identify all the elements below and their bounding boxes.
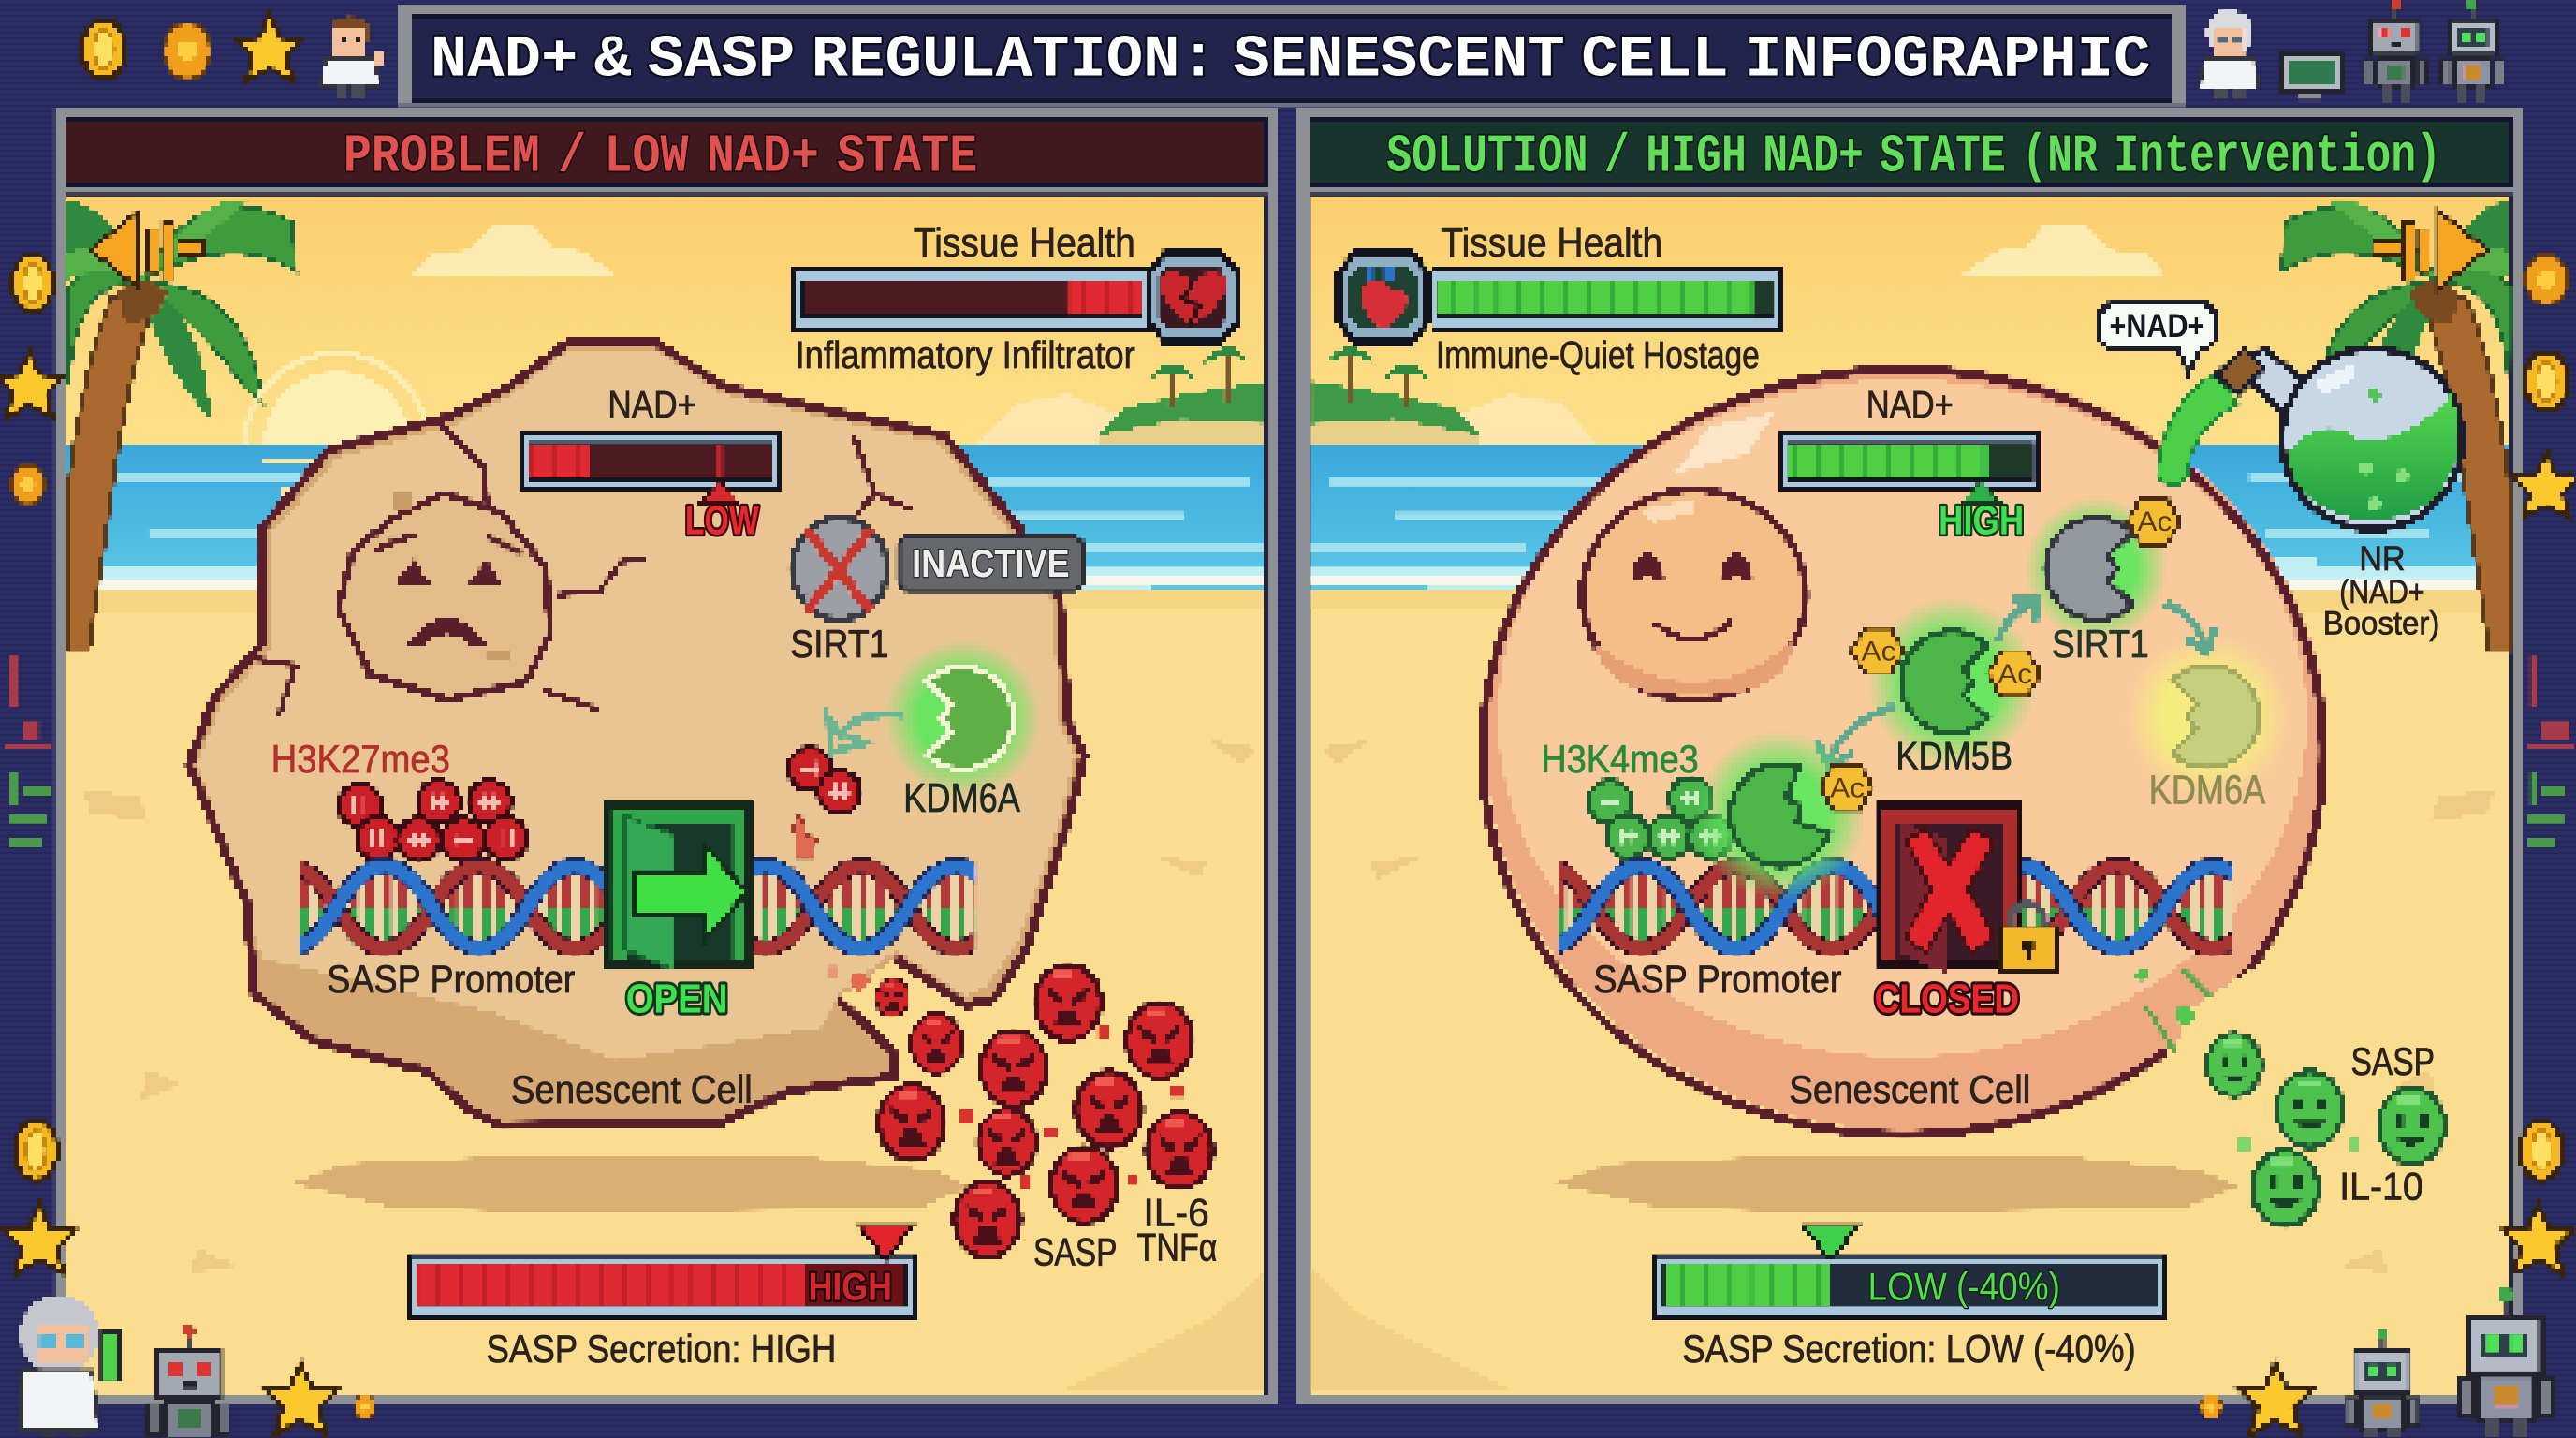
- callout bubble: +NAD+: [2098, 302, 2217, 373]
- sun: [245, 353, 429, 446]
- scene: solution beach background: [1312, 198, 2510, 1394]
- arrow: KDM6A removes marks: [829, 714, 903, 753]
- label: booster: Booster): [2323, 606, 2439, 642]
- arrow: KDM5B to SIRT1: [1998, 598, 2037, 641]
- label: tissue health left: Tissue Health: [914, 220, 1135, 266]
- tissue health bar left: [792, 268, 1150, 332]
- KDM6A inactive enzyme: [2126, 635, 2291, 799]
- panel: problem frame: [54, 107, 1278, 1405]
- label: tissue health right: Tissue Health: [1441, 220, 1662, 266]
- label: H3K27me3: H3K27me3: [271, 737, 450, 781]
- scene: problem beach background: [67, 198, 1265, 1394]
- caption: SASP secretion low: SASP Secretion: LOW (-40%): [1682, 1327, 2136, 1371]
- caption: SASP secretion high: SASP Secretion: HIGH: [487, 1327, 836, 1371]
- tissue health bar right: [1431, 268, 1784, 332]
- Ac labels: Ac: [1862, 637, 1895, 668]
- cell shadow left: [291, 1155, 970, 1212]
- bottom-left characters: [20, 1295, 375, 1438]
- status: CLOSED: CLOSED: [1875, 976, 2019, 1021]
- label: KDM6A left: KDM6A: [903, 775, 1021, 821]
- label: H3K4me3: H3K4me3: [1541, 737, 1699, 781]
- label: NAD+ left: NAD+: [607, 383, 696, 426]
- heading: problem: PROBLEM / LOW NAD+ STATE: [344, 127, 977, 188]
- badge: inactive: [899, 537, 1083, 590]
- arrow: KDM5B to H3K4me3: [1817, 707, 1895, 766]
- panel: solution frame: [1298, 107, 2522, 1405]
- Ac labels: Ac: [2137, 506, 2172, 537]
- cell shadow right: [1553, 1155, 2237, 1212]
- side coins and stars right: [2504, 255, 2576, 1273]
- bar text: HIGH: HIGH: [809, 1265, 892, 1309]
- bar text: LOW -40%: LOW (-40%): [1868, 1265, 2060, 1309]
- label: TNF alpha: TNFα: [1137, 1225, 1218, 1269]
- Ac labels: Ac: [1998, 659, 2032, 690]
- nucleus: sad face: [339, 493, 550, 700]
- SASP bar left: [406, 1226, 916, 1320]
- bottom-right characters: [2201, 1287, 2553, 1438]
- label: INACTIVE: INACTIVE: [912, 541, 1070, 585]
- SASP bar right: [1653, 1226, 2167, 1320]
- status: HIGH: HIGH: [1939, 498, 2024, 544]
- open door: [605, 802, 753, 970]
- label: senescent cell left: Senescent Cell: [511, 1067, 753, 1111]
- text layer: [271, 26, 2441, 1371]
- icon: healthy heart: [1336, 250, 1431, 345]
- label: KDM5B: KDM5B: [1895, 734, 2012, 778]
- header icons left: coins, star, scientist: [82, 15, 383, 98]
- icon: NR flask pouring: [2157, 348, 2463, 529]
- senescent cell right: [1483, 365, 2328, 1135]
- status: OPEN: OPEN: [626, 976, 728, 1021]
- header icons right: scientist, monitor, robots: [2200, 0, 2503, 103]
- label: IL-10: IL-10: [2339, 1164, 2423, 1208]
- icon: broken heart: [1145, 250, 1240, 345]
- label: NAD+ booster line: (NAD+: [2339, 574, 2425, 610]
- KDM5B enzyme with Ac: [1852, 596, 2041, 768]
- H3K27me3 marks: [339, 781, 527, 861]
- status: LOW: LOW: [685, 498, 759, 544]
- label: IL-6: IL-6: [1144, 1191, 1209, 1235]
- arrow: SIRT1 to KDM6A: [2165, 603, 2215, 653]
- DNA helix right: [1499, 866, 2261, 948]
- label: SASP promoter right: SASP Promoter: [1593, 957, 1841, 1001]
- icon: inactive SIRT1 with red X: [792, 518, 887, 620]
- Ac labels: [1830, 506, 2172, 803]
- label: NAD+ right: NAD+: [1866, 383, 1954, 426]
- side decoration: level meters: [7, 657, 2572, 848]
- H3K4me3 marks: [1588, 777, 1732, 858]
- label: SIRT1 right: SIRT1: [2052, 622, 2149, 666]
- label: NR: NR: [2359, 539, 2405, 578]
- nucleus: happy face: [1582, 490, 1806, 700]
- closed door with X and lock: [1875, 802, 2056, 973]
- angry SASP cytokines: [879, 964, 1212, 1257]
- label: +NAD+: +NAD+: [2110, 308, 2204, 345]
- NAD+ gauge left: [520, 431, 782, 503]
- label: SASP right: SASP: [2351, 1039, 2435, 1083]
- label: senescent cell right: Senescent Cell: [1789, 1067, 2030, 1111]
- removed methyl marks and pointer: [788, 748, 861, 858]
- calm SASP cytokines: [2207, 1034, 2445, 1226]
- NAD+ gauge right: [1778, 431, 2042, 503]
- title banner frame: [399, 4, 2185, 105]
- label: SASP left: SASP: [1033, 1230, 1117, 1274]
- Ac labels: Ac: [1830, 772, 1865, 803]
- label: immune-quiet hostage: Immune-Quiet Hostage: [1436, 333, 1760, 376]
- side coins and stars left: [0, 255, 74, 1273]
- released SASP droplets: [827, 966, 909, 1017]
- writer enzyme with Ac: [1695, 729, 1873, 901]
- KDM6A enzyme left: [884, 639, 1042, 797]
- senescent cell left: [189, 344, 1084, 1125]
- SIRT1 active enzyme with Ac: [2024, 496, 2180, 641]
- title: NAD+ & SASP REGULATION: SENESCENT CELL INFOGRAPHIC: [431, 26, 2150, 94]
- DNA helix left: [242, 866, 1003, 948]
- label: SASP promoter left: SASP Promoter: [327, 957, 575, 1001]
- label: KDM6A right: KDM6A: [2149, 767, 2266, 813]
- label: SIRT1 left: SIRT1: [790, 622, 889, 666]
- label: inflammatory infiltrator: Inflammatory Infiltrator: [795, 333, 1135, 376]
